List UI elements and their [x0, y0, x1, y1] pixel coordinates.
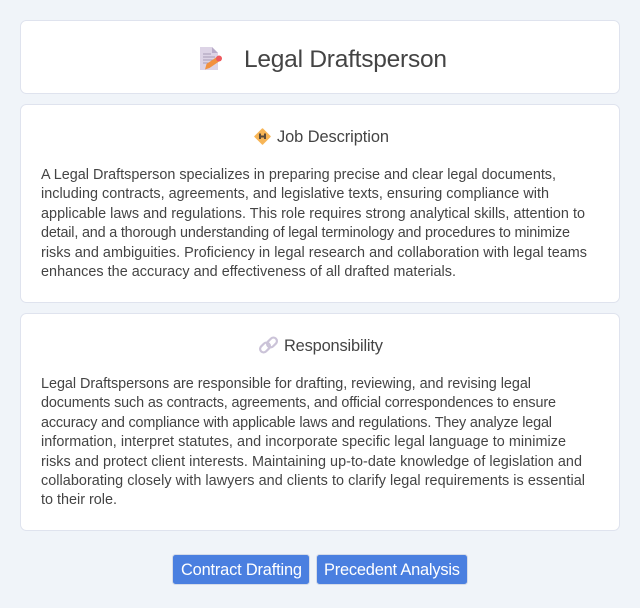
icon: document with pencil: [200, 47, 222, 70]
job description text: risks and ambiguities. Proficiency in legal research and collaboration with legal teams: [41, 245, 587, 261]
responsibility text: risks and protect client interests. Maintaining up-to-date knowledge of legislation and: [41, 454, 582, 470]
responsibility text: to their role.: [41, 492, 117, 508]
responsibility text: information, interpret statutes, and incorporate specific legal language to minimize: [41, 434, 566, 450]
job description text: [41, 167, 587, 280]
responsibility text: Legal Draftspersons are responsible for drafting, reviewing, and revising legal: [41, 376, 531, 392]
job description text: applicable laws and regulations. This role requires strong analytical skills, attention to: [41, 206, 585, 222]
job description text: including contracts, agreements, and legislative texts, ensuring compliance with: [41, 186, 549, 202]
responsibility heading: Responsibility: [284, 337, 384, 355]
responsibility text: documents such as contracts, agreements, and official correspondences to ensure: [41, 395, 556, 411]
tag: precedent analysis: [316, 554, 468, 584]
panel: title: [20, 20, 620, 94]
icon: chain link: [259, 336, 278, 354]
title text: Legal Draftsperson: [244, 46, 447, 73]
tag: contract drafting: [172, 554, 310, 584]
icon: diamond sign: [255, 129, 270, 144]
panel: responsibility: [20, 314, 620, 530]
responsibility text: accuracy and compliance with applicable laws and regulations. They analyze legal: [41, 415, 552, 431]
tag: precedent analysis: Precedent Analysis: [324, 561, 460, 579]
job description heading: Job Description: [277, 128, 389, 146]
panel: job description: [20, 104, 620, 302]
job description text: enhances the accuracy and effectiveness of all drafted materials.: [41, 264, 456, 280]
tag: contract drafting: Contract Drafting: [181, 561, 302, 579]
job description text: detail, and a thorough understanding of legal terminology and procedures to minimize: [41, 225, 570, 241]
responsibility text: [41, 376, 585, 508]
responsibility text: collaborating closely with lawyers and clients to clarify legal requirements is essential: [41, 473, 585, 489]
job description text: A Legal Draftsperson specializes in preparing precise and clear legal documents,: [41, 167, 556, 183]
